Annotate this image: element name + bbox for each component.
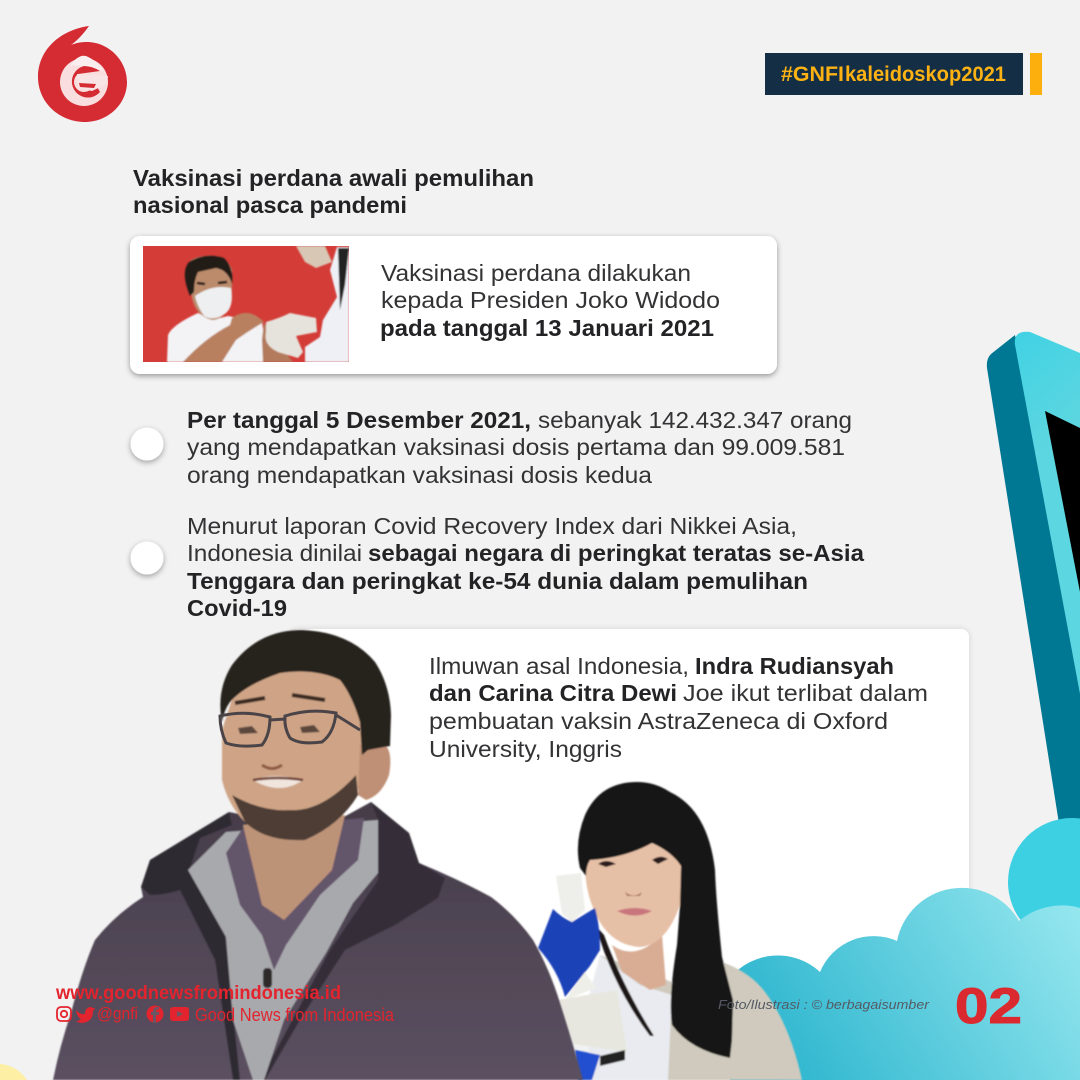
footer: social handles — [57, 1004, 395, 1025]
text block: dose counts: sebanyak 142.432.347 orang — [538, 407, 852, 433]
text block: recovery index: Tenggara dan peringkat ke-54 dunia dalam pemulihan — [187, 568, 808, 594]
text block: scientists: Ilmuwan asal Indonesia, — [429, 653, 689, 679]
icon: instagram — [57, 1007, 71, 1021]
panel text: Vaksinasi perdana dilakukan — [381, 260, 691, 286]
decorative front cloud — [730, 888, 1080, 1080]
footer: website: www.goodnewsfromindonesia.id — [55, 983, 341, 1004]
text block: dose counts — [187, 407, 852, 488]
text block: dose counts: Per tanggal 5 Desember 2021, — [187, 407, 531, 433]
text block: recovery index: sebagai negara di peringkat teratas se-Asia — [368, 540, 864, 566]
text block: dose counts: orang mendapatkan vaksinasi dosis kedua — [187, 462, 652, 488]
hashtag badge: #GNFI — [781, 63, 844, 86]
icon: youtube — [170, 1007, 189, 1021]
text block: recovery index: Indonesia dinilai — [187, 540, 362, 566]
icon: facebook — [146, 1006, 164, 1023]
text block: scientists — [429, 653, 928, 762]
panel text: pada tanggal 13 Januari 2021 — [380, 315, 714, 341]
text block: recovery index — [187, 513, 864, 621]
heading: Vaksinasi perdana awali pemulihan — [133, 165, 534, 191]
text block: scientists: dan Carina Citra Dewi — [429, 680, 677, 706]
text block: scientists: University, Inggris — [429, 736, 622, 762]
handle text: @gnfi — [97, 1004, 138, 1023]
accent bar — [1030, 53, 1042, 95]
bullet marker 1 — [130, 428, 164, 460]
text block: scientists: Joe ikut terlibat dalam — [683, 680, 928, 706]
hashtag badge — [765, 53, 1023, 95]
text block: scientists: Indra Rudiansyah — [695, 653, 894, 679]
logo — [38, 26, 127, 122]
heading — [133, 165, 534, 218]
panel: first vaccination — [130, 236, 777, 374]
photo credit: Foto/Ilustrasi : © berbagaisumber — [718, 997, 930, 1012]
page number: 02 — [955, 978, 1022, 1034]
photo: president being vaccinated — [143, 246, 349, 362]
text block: recovery index: Menurut laporan Covid Recovery Index dari Nikkei Asia, — [187, 513, 797, 539]
page name: Good News from Indonesia — [195, 1005, 395, 1025]
text block: dose counts: yang mendapatkan vaksinasi dosis pertama dan 99.009.581 — [187, 434, 845, 460]
text block: scientists: pembuatan vaksin AstraZeneca di Oxford — [429, 708, 888, 734]
heading: nasional pasca pandemi — [133, 192, 407, 218]
panel text — [380, 260, 720, 341]
photo: woman scientist — [538, 782, 802, 1080]
icon: twitter — [76, 1007, 95, 1023]
hashtag badge: kaleidoskop2021 — [845, 63, 1006, 86]
illustration: tablet — [987, 332, 1080, 830]
bullet marker 2 — [130, 542, 164, 574]
text block: recovery index: Covid-19 — [187, 595, 287, 621]
photo: man scientist — [53, 630, 583, 1080]
panel text: kepada Presiden Joko Widodo — [381, 287, 720, 313]
decorative yellow corner — [0, 1064, 32, 1080]
decorative back cloud — [1008, 818, 1080, 946]
panel: scientists — [290, 629, 969, 1029]
